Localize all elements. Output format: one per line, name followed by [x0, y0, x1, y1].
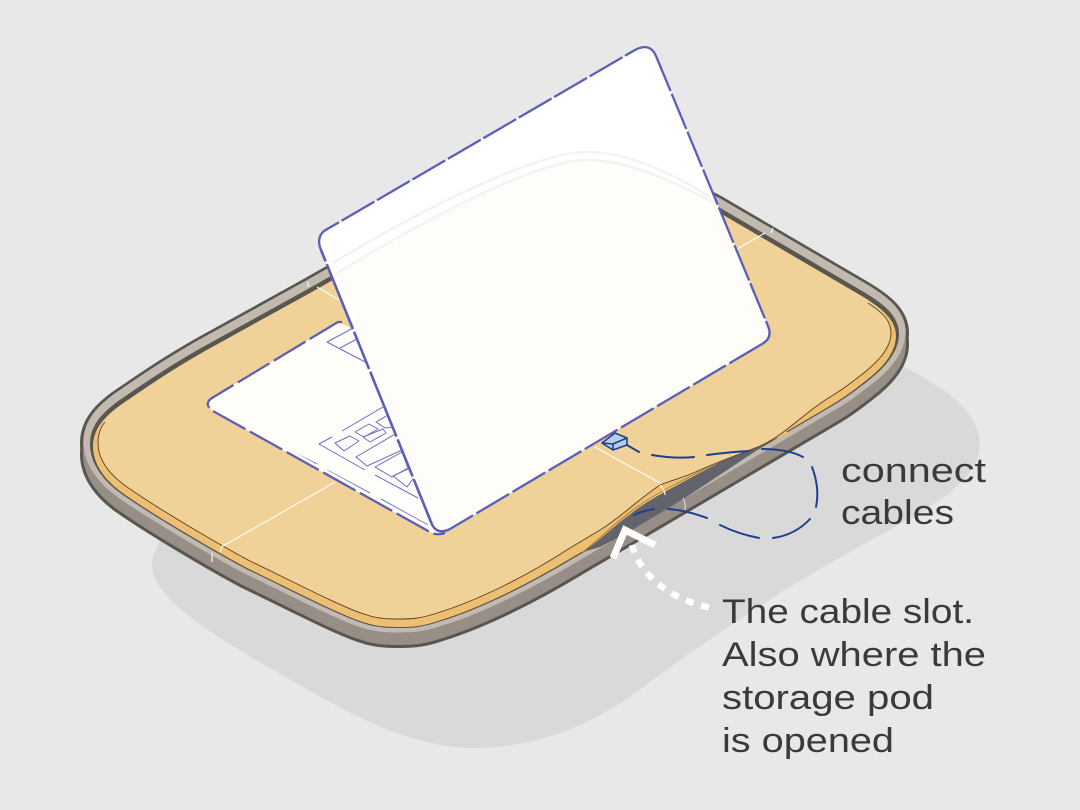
tray inner dark line [98, 171, 891, 620]
laptop screen [319, 47, 770, 531]
laptop base [208, 322, 500, 533]
label: the cable slot: storage pod [722, 679, 934, 717]
padded cushion side [98, 173, 891, 622]
keyboard [290, 328, 428, 526]
white arrow head [613, 530, 655, 558]
lap tray [98, 167, 891, 630]
flap underside strip [570, 430, 790, 552]
seam lines [212, 228, 773, 562]
tray grey lower band [98, 170, 891, 630]
label: the cable slot: is opened [722, 722, 894, 760]
cushion top surface [98, 170, 891, 619]
tray outer rim [98, 170, 891, 630]
label: the cable slot: Also where the [722, 636, 986, 674]
laptop base outline [208, 322, 445, 534]
slot opening [583, 437, 777, 552]
see-through tray area on screen [337, 160, 770, 531]
laptop [208, 47, 770, 534]
white dotted arrow line [632, 545, 712, 608]
cushion upper fill [98, 167, 891, 616]
see-through tray arc [333, 152, 715, 273]
label: the cable slot [722, 593, 986, 760]
connect cable [627, 445, 817, 538]
label: the cable slot: The cable slot. [722, 593, 974, 631]
screen outline [319, 47, 770, 531]
tray drop shadow [152, 365, 980, 748]
label: connect cables [841, 452, 987, 532]
flap underside edge [583, 438, 777, 552]
tray light beige band [98, 169, 891, 618]
label: connect cables: connect [841, 452, 987, 490]
infographic illustration [80, 46, 986, 759]
label: connect cables: cables [841, 494, 954, 532]
connector plug [602, 433, 627, 450]
cushion brown edge line [98, 303, 891, 619]
